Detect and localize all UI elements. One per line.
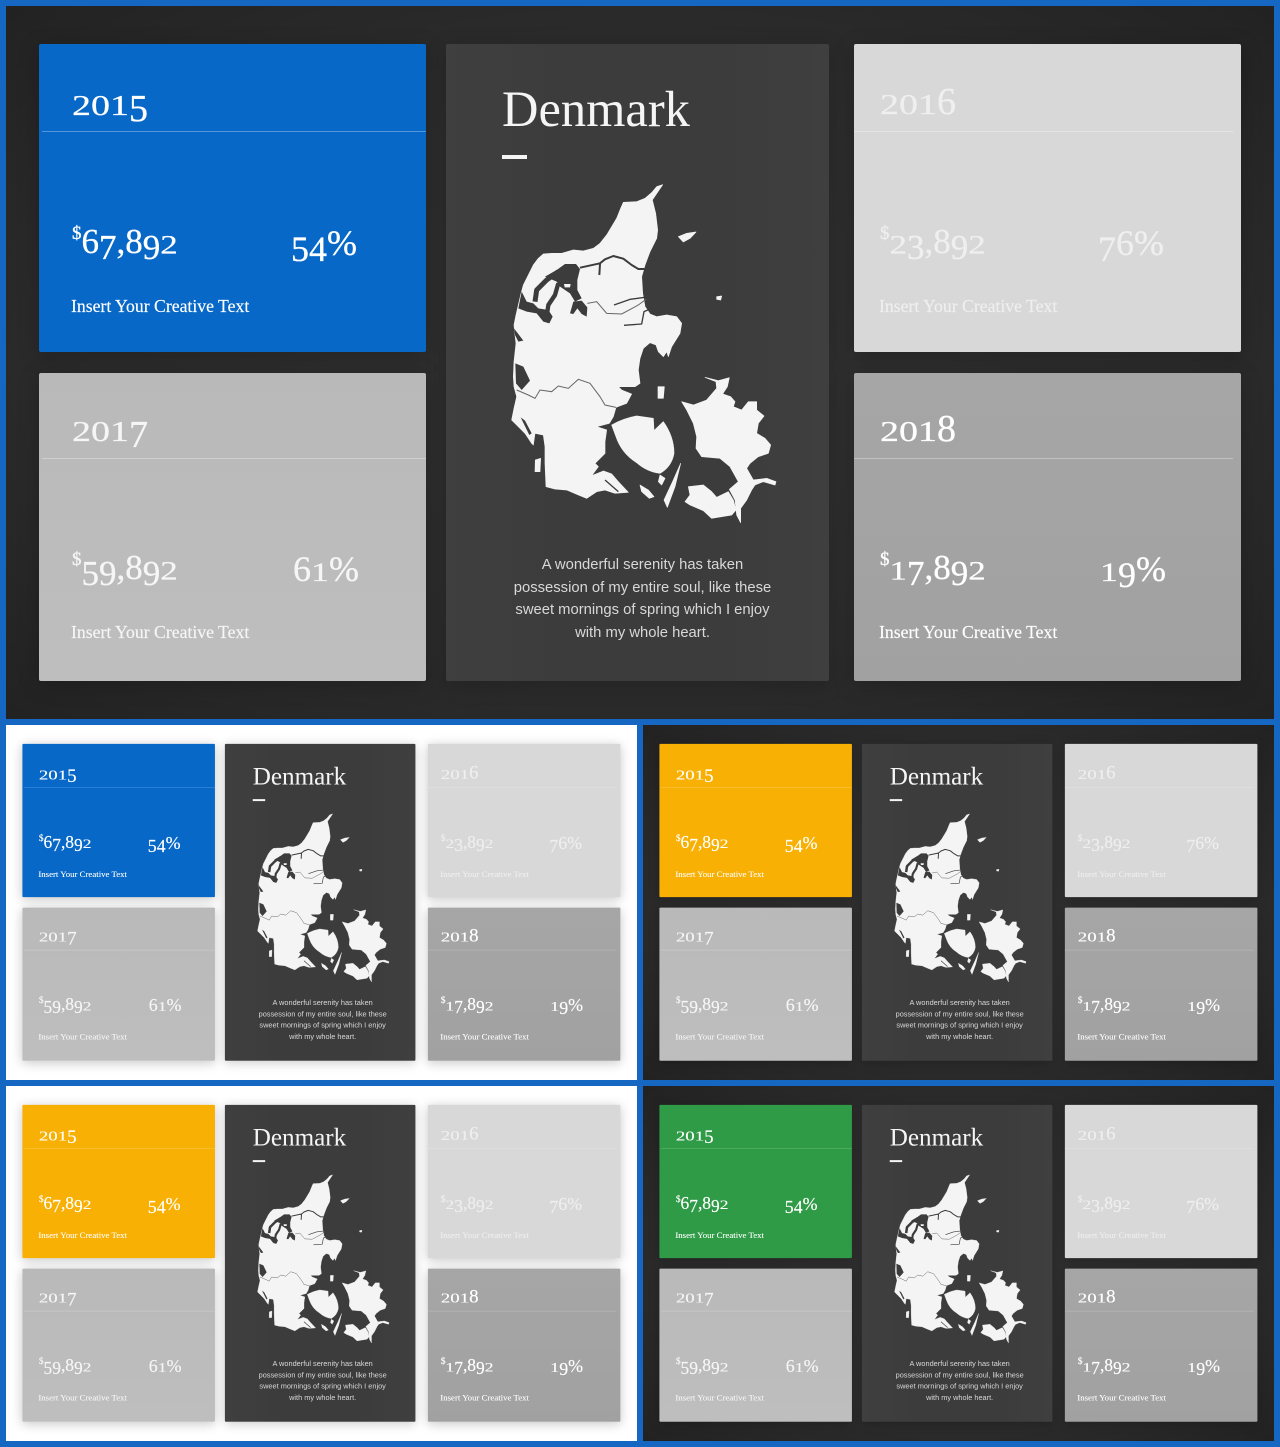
caption: Insert Your Creative Text <box>879 296 1057 316</box>
percentage: 76% <box>1098 223 1164 269</box>
card: 2018: $7,89 <box>1077 1356 1121 1378</box>
year: 5 <box>129 88 148 130</box>
year: 201 <box>72 91 129 122</box>
card: 2017: 2 <box>82 1360 91 1374</box>
revenue value: 2 <box>968 556 986 585</box>
card: 2018: 2 <box>1121 999 1130 1013</box>
card: 2015: 5 <box>704 1127 713 1148</box>
revenue value: $59,89 <box>72 548 160 593</box>
card: 2016: 2 <box>484 1198 493 1212</box>
card: 2015 <box>22 1105 215 1258</box>
year <box>72 414 148 456</box>
card: 2018: 1 <box>550 999 559 1014</box>
card: 2016: 2 <box>445 1198 454 1212</box>
card: 2017 <box>22 908 215 1061</box>
card: 2017: 2 <box>82 999 91 1013</box>
percentage: 6 % <box>293 549 359 589</box>
card: 2015: 2 <box>82 837 91 851</box>
card: 2017 <box>659 908 852 1061</box>
card: 2015: 201 <box>675 1128 704 1144</box>
card: 2016: 76% <box>1186 1194 1219 1217</box>
revenue value: 2 <box>968 230 986 259</box>
card: 2015 <box>39 44 426 352</box>
card: 2017: 1 <box>794 1360 803 1375</box>
card: 2016: 2 <box>1082 837 1091 851</box>
card: 2015: 2 <box>719 1198 728 1212</box>
card: 2018 <box>427 908 620 1061</box>
card: 2017 <box>22 1269 215 1422</box>
card: 2018: Insert Your Creative Text <box>1077 1032 1166 1042</box>
card: 2016: 76% <box>549 1194 582 1217</box>
card: 2017: $59,89 <box>38 1356 82 1378</box>
year <box>880 408 956 450</box>
year: 201 <box>880 90 937 121</box>
card: 2017: Insert Your Creative Text <box>38 1393 127 1403</box>
card: 2015: Insert Your Creative Text <box>38 1230 127 1240</box>
card: 2016: 2 <box>484 837 493 851</box>
card: 2018: 9% <box>559 1356 583 1379</box>
card: 2018: 9% <box>1196 1356 1220 1379</box>
card: 2017: $59,89 <box>38 995 82 1017</box>
card: 2017: 6% <box>148 995 181 1015</box>
card: 2017: 7 <box>67 928 76 949</box>
panel: Denmark centre: Denmark <box>252 762 346 790</box>
year: 201 <box>72 417 129 448</box>
year <box>880 81 956 123</box>
card: 2016: $3,89 <box>1077 1194 1121 1216</box>
card: 2016: 2 <box>1121 1198 1130 1212</box>
card: 2015: 201 <box>38 1128 67 1144</box>
panel: Denmark centre: with my whole heart. <box>926 1033 993 1041</box>
percentage: 54% <box>291 223 357 269</box>
card: 2018 <box>427 1269 620 1422</box>
panel: Denmark centre: possession of my entire soul, like these <box>895 1372 1023 1379</box>
card: 2015: 5 <box>67 1127 76 1148</box>
card: 2016: 201 <box>440 767 469 782</box>
card: 2018 <box>854 373 1241 681</box>
card: 2017: $59,89 <box>675 1356 719 1378</box>
card: 2015: 54% <box>784 833 817 856</box>
percentage: 1 <box>1100 557 1118 587</box>
card: 2015: 2 <box>82 1198 91 1212</box>
card: 2017: Insert Your Creative Text <box>675 1393 764 1403</box>
revenue value: 2 <box>160 556 178 585</box>
card: 2016 <box>427 1105 620 1258</box>
card: 2018: $7,89 <box>440 1356 484 1378</box>
card: 2017 <box>659 1269 852 1422</box>
panel: Denmark centre: A wonderful serenity has taken <box>272 999 372 1007</box>
description text: with my whole heart. <box>575 625 710 641</box>
card: 2016: 201 <box>1077 1128 1106 1143</box>
year: 6 <box>937 81 956 123</box>
percentage: 1 <box>311 557 329 587</box>
card: 2016: 201 <box>440 1128 469 1143</box>
heading: Denmark <box>502 81 690 137</box>
card: 2017: 201 <box>675 1290 704 1306</box>
card: 2018: $7,89 <box>1077 995 1121 1017</box>
card: 2016: Insert Your Creative Text <box>440 1230 529 1240</box>
card: 2015: Insert Your Creative Text <box>38 869 127 879</box>
card: 2016: Insert Your Creative Text <box>440 869 529 879</box>
card: 2015: $67,89 <box>38 1194 82 1216</box>
panel: Denmark centre: sweet mornings of spring which I enjoy <box>259 1022 385 1030</box>
card: 2017: 1 <box>157 1360 166 1375</box>
panel: Denmark centre: with my whole heart. <box>926 1394 993 1402</box>
revenue value: $ 7,89 <box>880 548 968 593</box>
card: 2015: 201 <box>675 767 704 783</box>
panel: Denmark centre <box>224 744 415 1061</box>
card: 2016: 76% <box>549 833 582 856</box>
card: 2017: 1 <box>157 999 166 1014</box>
card: 2017: 6% <box>785 1356 818 1376</box>
year: 7 <box>129 414 148 456</box>
card: 2017: 2 <box>719 1360 728 1374</box>
card: 2018: 8 <box>469 1286 478 1307</box>
card: 2018: 1 <box>550 1360 559 1375</box>
panel: dark variant green <box>643 1086 1274 1441</box>
card: 2018: 1 <box>1082 999 1091 1013</box>
card: 2018: 1 <box>1187 1360 1196 1375</box>
card: 2017: $59,89 <box>675 995 719 1017</box>
panel: main dark slide <box>6 6 1274 719</box>
percentage: 9% <box>1118 549 1166 595</box>
card: 2018: Insert Your Creative Text <box>440 1393 529 1403</box>
card: 2016: 6 <box>469 762 478 783</box>
revenue value: 2 <box>160 230 178 259</box>
card: 2017: 7 <box>704 928 713 949</box>
panel: Denmark centre <box>446 44 829 681</box>
map of Denmark <box>511 184 776 523</box>
card: 2018: 2 <box>484 1360 493 1374</box>
card: 2017: 6% <box>148 1356 181 1376</box>
card: 2017: 7 <box>704 1289 713 1310</box>
panel: Denmark centre: possession of my entire soul, like these <box>258 1372 386 1379</box>
year: 201 <box>880 417 937 448</box>
card: 2018: 8 <box>1106 1286 1115 1307</box>
card: 2016: 2 <box>1082 1198 1091 1212</box>
revenue value: 1 <box>890 556 907 585</box>
card: 2018: 1 <box>445 999 454 1013</box>
card: 2015: $67,89 <box>675 1194 719 1216</box>
card: 2018: 201 <box>440 929 469 945</box>
card: 2016: 2 <box>1121 837 1130 851</box>
card: 2018: 9% <box>1196 995 1220 1018</box>
card: 2016 <box>854 44 1241 352</box>
card: 2018: 8 <box>469 925 478 946</box>
panel: Denmark centre <box>861 1105 1052 1422</box>
panel: Denmark centre: A wonderful serenity has taken <box>909 1360 1009 1368</box>
description text: A wonderful serenity has taken <box>542 557 743 573</box>
panel: Denmark centre: A wonderful serenity has taken <box>909 999 1009 1007</box>
card: 2016: 2 <box>445 837 454 851</box>
card: 2018 <box>1064 1269 1257 1422</box>
card: 2016: 6 <box>1106 1123 1115 1144</box>
card: 2017: 1 <box>794 999 803 1014</box>
card: 2018: 2 <box>484 999 493 1013</box>
card: 2017: 201 <box>38 929 67 945</box>
year: 8 <box>937 408 956 450</box>
caption: Insert Your Creative Text <box>879 622 1057 642</box>
card: 2015 <box>659 744 852 897</box>
card: 2015: 201 <box>38 767 67 783</box>
revenue value: 2 <box>890 230 907 259</box>
card: 2017: 7 <box>67 1289 76 1310</box>
card: 2017: Insert Your Creative Text <box>675 1032 764 1042</box>
card: 2016: $3,89 <box>440 833 484 855</box>
panel: Denmark centre: sweet mornings of spring which I enjoy <box>259 1383 385 1391</box>
card: 2018 <box>1064 908 1257 1061</box>
panel: Denmark centre: Denmark <box>889 762 983 790</box>
panel: Denmark centre: with my whole heart. <box>289 1394 356 1402</box>
panel: Denmark centre <box>224 1105 415 1422</box>
card: 2018: 1 <box>1187 999 1196 1014</box>
card: 2016: Insert Your Creative Text <box>1077 869 1166 879</box>
card: 2015: 54% <box>784 1194 817 1217</box>
card: 2016 <box>1064 1105 1257 1258</box>
card: 2016: Insert Your Creative Text <box>1077 1230 1166 1240</box>
panel: Denmark centre: with my whole heart. <box>289 1033 356 1041</box>
card: 2016: 6 <box>469 1123 478 1144</box>
panel: Denmark centre: sweet mornings of spring which I enjoy <box>896 1022 1022 1030</box>
card: 2015: 2 <box>719 837 728 851</box>
card: 2018: Insert Your Creative Text <box>1077 1393 1166 1403</box>
card: 2018: 201 <box>440 1290 469 1306</box>
panel: white variant blue <box>6 725 637 1080</box>
card: 2015: 54% <box>147 833 180 856</box>
card: 2018: 9% <box>559 995 583 1018</box>
card: 2015: Insert Your Creative Text <box>675 869 764 879</box>
card: 2017: 2 <box>719 999 728 1013</box>
card: 2018: 201 <box>1077 929 1106 945</box>
caption: Insert Your Creative Text <box>71 296 249 316</box>
panel: dark variant amber <box>643 725 1274 1080</box>
card: 2017: 201 <box>675 929 704 945</box>
panel: white variant amber <box>6 1086 637 1441</box>
description text <box>514 557 771 641</box>
card: 2018: $7,89 <box>440 995 484 1017</box>
card: 2015 <box>22 744 215 897</box>
card: 2017: 201 <box>38 1290 67 1306</box>
card: 2015: 5 <box>67 766 76 787</box>
card: 2015 <box>659 1105 852 1258</box>
card: 2015: Insert Your Creative Text <box>675 1230 764 1240</box>
card: 2018: 1 <box>445 1360 454 1374</box>
panel: Denmark centre <box>861 744 1052 1061</box>
panel: Denmark centre: possession of my entire soul, like these <box>258 1011 386 1018</box>
card: 2018: 201 <box>1077 1290 1106 1306</box>
card: 2015: $67,89 <box>675 833 719 855</box>
card: 2016 <box>427 744 620 897</box>
revenue value: $67,89 <box>72 222 160 267</box>
card: 2015: 5 <box>704 766 713 787</box>
description text: possession of my entire soul, like these <box>514 580 771 596</box>
panel: Denmark centre: Denmark <box>889 1123 983 1151</box>
year <box>72 88 148 130</box>
revenue value: $ 3,89 <box>880 222 968 267</box>
card: 2017 <box>39 373 426 681</box>
panel: Denmark centre: possession of my entire soul, like these <box>895 1011 1023 1018</box>
panel: Denmark centre: sweet mornings of spring which I enjoy <box>896 1383 1022 1391</box>
panel: Denmark centre: Denmark <box>252 1123 346 1151</box>
panel: Denmark centre: A wonderful serenity has taken <box>272 1360 372 1368</box>
card: 2015: 54% <box>147 1194 180 1217</box>
card: 2018: Insert Your Creative Text <box>440 1032 529 1042</box>
card: 2016: $3,89 <box>440 1194 484 1216</box>
card: 2018: 2 <box>1121 1360 1130 1374</box>
card: 2016 <box>1064 744 1257 897</box>
card: 2018: 8 <box>1106 925 1115 946</box>
card: 2016: 6 <box>1106 762 1115 783</box>
card: 2016: 76% <box>1186 833 1219 856</box>
card: 2017: 6% <box>785 995 818 1015</box>
card: 2018: 1 <box>1082 1360 1091 1374</box>
card: 2015: $67,89 <box>38 833 82 855</box>
card: 2016: $3,89 <box>1077 833 1121 855</box>
card: 2016: 201 <box>1077 767 1106 782</box>
card: 2017: Insert Your Creative Text <box>38 1032 127 1042</box>
description text: sweet mornings of spring which I enjoy <box>515 602 770 618</box>
caption: Insert Your Creative Text <box>71 622 249 642</box>
